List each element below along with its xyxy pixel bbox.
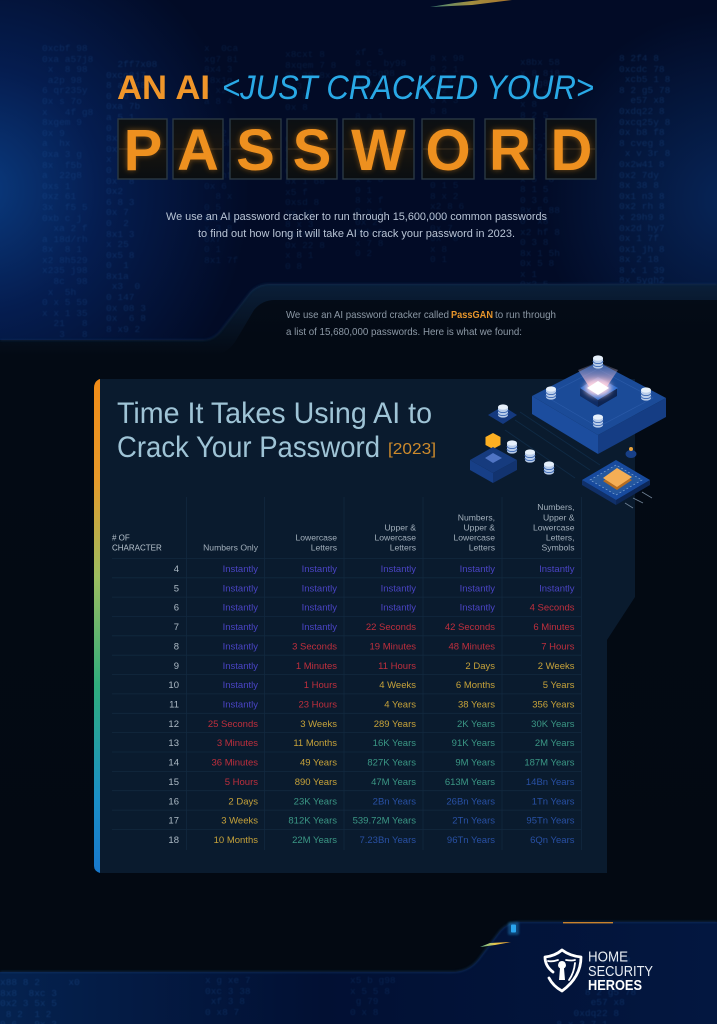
row: 13 characters: 16K Years — [373, 738, 416, 749]
row: 16 characters: 26Bn Years — [446, 796, 495, 807]
column: lowercase letters: Letters — [311, 543, 337, 553]
row: 7 characters: 6 Minutes — [533, 622, 575, 633]
row: 15 characters: 5 Hours — [225, 777, 258, 788]
column: all character types: Symbols — [542, 543, 574, 553]
row: 6 characters: Instantly — [223, 603, 258, 614]
row: 18 characters — [168, 835, 575, 846]
row: 14 characters — [168, 758, 575, 769]
row: 6 characters: Instantly — [381, 603, 416, 614]
row: 9 characters: 2 Weeks — [538, 661, 575, 672]
row: 18 characters: 18 — [168, 835, 179, 846]
tile: W: W — [351, 118, 406, 183]
row: 16 characters: 1Tn Years — [532, 796, 575, 807]
row: 17 characters: 2Tn Years — [452, 816, 495, 827]
column: all character types: Upper & — [543, 513, 575, 523]
row: 4 characters: Instantly — [460, 564, 495, 575]
intro text: to find out how long it will take AI to crack your password in 2023. — [198, 228, 515, 240]
tile: O: O — [425, 118, 471, 183]
row: 4 characters: Instantly — [539, 564, 575, 575]
background pattern: faint hex code columns: 8 x 98 0 2 1 f 8 x 2 0 x 3 8 8 x 1 0 3 xsxfoy 8 8 1 0 0x 3 0 1 5 8 x 2 x2 8 6 0 2 0x 7 0x 8 x 8 0 1 — [430, 53, 476, 265]
row: 10 characters: 1 Hours — [304, 680, 337, 691]
row: 16 characters — [168, 796, 575, 807]
yellow hexagon — [486, 433, 500, 449]
small block — [470, 447, 517, 483]
row: 4 characters: Instantly — [302, 564, 337, 575]
row: 11 characters: 4 Years — [384, 700, 416, 710]
illustration: isometric AI chips — [470, 355, 666, 508]
row: 14 characters: 36 Minutes — [212, 758, 258, 769]
row: 15 characters: 15 — [168, 777, 179, 788]
pin marker — [626, 447, 636, 458]
row: 13 characters: 2M Years — [535, 738, 575, 749]
panel heading: Crack Your Password — [117, 431, 380, 464]
top accent: orange dashes — [430, 0, 512, 7]
background pattern: faint hex code columns: xf 5 8 c by98 x 55g98 0xd 8 8 a 1 x 5 0x 1 8 x 6 x 2 8 0 1 8 x f 0 x 1 0x 2 0xh 8 x 7 8 0 2 — [355, 47, 406, 259]
dark content backdrop with stepped edge — [0, 284, 717, 972]
panel heading: [2023] — [388, 441, 436, 458]
row: 5 characters: 5 — [174, 583, 179, 594]
tile: R: R — [489, 118, 531, 183]
row: 4 characters: Instantly — [223, 564, 258, 575]
row: 11 characters: 38 Years — [458, 700, 495, 710]
title word: PASSWORD flip tiles — [118, 118, 596, 183]
background pattern: faint hex code columns: x g xe 7 0xc 3 38 xf 3 8 0 x8 7 — [205, 975, 251, 1018]
panel heading — [117, 397, 436, 464]
row: 13 characters: 3 Minutes — [217, 738, 258, 749]
column: upper and lowercase: Upper & — [384, 523, 416, 533]
row: 18 characters: 7.23Bn Years — [359, 835, 416, 846]
column: upper and lowercase: Lowercase — [374, 533, 416, 543]
table body — [168, 564, 575, 846]
background pattern: faint hex code columns: x8cxt 8 8xqem 7 8 0x 30 8x g 3 x 8 0x 8 0 7 8x 2a x 2 8hm 0xb j9 8x 1 68 x5 f 0xsd 8 0x 38 8 x 3 0x98j8 0x 22 8 x 8 1 0 8 — [285, 49, 336, 272]
tile: P: P — [124, 118, 162, 183]
large platform — [532, 355, 666, 454]
logo: Home Security Heroes — [545, 950, 653, 994]
panel heading: Time It Takes Using AI to — [117, 397, 432, 430]
row: 12 characters — [168, 719, 575, 730]
column: lowercase letters: Lowercase — [295, 533, 337, 543]
row: 8 characters: 3 Seconds — [292, 641, 337, 652]
column: numbers, upper and lowercase: Upper & — [463, 523, 495, 533]
table: grid lines — [112, 497, 582, 850]
row: 6 characters — [174, 603, 575, 614]
logo: Home Security Heroes: HEROES — [588, 978, 642, 994]
methodology text: PassGAN — [451, 310, 493, 321]
gradient side bar — [94, 379, 100, 873]
row: 12 characters: 25 Seconds — [208, 719, 258, 730]
background pattern: faint hex code columns: 8 2f4 8 0xcdc 78 xcb5 1 8 8 2 g5 78 e57 x8 0xdq22 8 0xcq25y 8 0x b8 f8 8 cveg 8 x v 3r 8 0x2w41 8 0x2 7dy 8x 38 8 0x1 n3 8 0x2 rh 8 x 29h9 8 0x2d hy7 0x 1 7f 0x1 jh 8 8x 2 18 8 x 1 39 8x 5ygh2 9x1 b9y 8x2 5h 8 x 28 8 — [619, 53, 670, 318]
row: 5 characters — [174, 583, 575, 594]
row: 4 characters — [174, 564, 575, 575]
row: 12 characters: 2K Years — [457, 719, 495, 730]
logo: Home Security Heroes: SECURITY — [588, 964, 653, 980]
row: 8 characters: 19 Minutes — [370, 641, 416, 652]
background pattern: faint hex code columns: 2ff7x08 0xcc8j7 8 a0 38x 0 6 0xa 7b a 5 1 0 8 8x2 7 0x 5 5 x 2 a 9 0 1 0x 8 0x2 6 8 3 0x 7 0 2 8x1 3 x 25 0x5 8 0 1 8x1a x3 0 0 147 0x 08 3 0x 6 8 8 x9 2 — [106, 59, 157, 335]
row: 17 characters: 17 — [168, 816, 179, 827]
tile: D: D — [551, 118, 592, 183]
row: 7 characters: Instantly — [223, 622, 258, 633]
row: 14 characters: 49 Years — [300, 758, 337, 769]
row: 10 characters — [168, 680, 575, 691]
row: 7 characters: 7 — [174, 622, 179, 633]
methodology text: to run through — [495, 310, 556, 321]
row: 18 characters: 6Qn Years — [530, 835, 575, 846]
row: 7 characters: 22 Seconds — [366, 622, 416, 633]
row: 18 characters: 10 Months — [214, 835, 258, 846]
table header — [112, 502, 575, 553]
methodology text: a list of 15,680,000 passwords. Here is what we found: — [286, 327, 522, 338]
tile: O: O — [425, 118, 471, 183]
row: 17 characters: 539.72M Years — [353, 816, 416, 827]
row: 10 characters: 6 Months — [456, 680, 495, 691]
row: 9 characters: 1 Minutes — [296, 661, 337, 672]
panel: time to crack table card — [94, 355, 666, 873]
background pattern: faint hex code columns: x5 b g98 x 5 5 8 g 79 0 x 8 — [350, 975, 396, 1018]
row: 13 characters: 11 Months — [293, 738, 337, 749]
column: number of characters — [112, 534, 162, 553]
row: 16 characters: 2 Days — [228, 796, 258, 807]
background pattern: faint hex code columns: x 0ca xg7 8i 8x4 3 8x1g 0 x2 a 8 4 8x 2 2 5h 0x 8c 6 x2 hf 0x 6 8 x 0 5 8x2 4j x 3 8 0x7 0 1 8x1 7f — [204, 43, 238, 266]
row: 12 characters: 3 Weeks — [300, 719, 337, 730]
row: 9 characters: 9 — [174, 661, 179, 672]
row: 12 characters: 30K Years — [531, 719, 575, 730]
row: 4 characters: 4 — [174, 564, 179, 575]
tile: S: S — [293, 118, 331, 183]
title line: An AI just cracked your: AN AI — [117, 69, 210, 107]
row: 7 characters — [174, 622, 575, 633]
intro text — [166, 211, 547, 240]
row: 14 characters: 14 — [168, 758, 179, 769]
column: all character types: Lowercase — [533, 523, 575, 533]
column: all character types — [533, 502, 575, 553]
row: 15 characters: 14Bn Years — [526, 777, 575, 788]
row: 13 characters: 13 — [168, 738, 179, 749]
tile: A: A — [177, 118, 219, 183]
column: numbers, upper and lowercase — [453, 513, 495, 553]
row: 9 characters — [174, 661, 575, 672]
background pattern: faint hex code columns: x8bx 58 x 8 8j8 0 g8 0 x 1 x 8 8 2 5 0 1 8 x 3 0x 2 x 8 3 x 5 8 8 1 5 0 3 6 8x 5 88 0 x8 x2 hf 8 0 3 8 8x 1 5h 0x 5 8 x 1 0x2 5 8 1 9 0 2 68 x 7 f — [520, 57, 560, 322]
row: 4 characters: Instantly — [381, 564, 416, 575]
column: numbers, upper and lowercase: Letters — [469, 543, 495, 553]
row: 10 characters: 4 Weeks — [379, 680, 416, 691]
row: 5 characters: Instantly — [460, 583, 495, 594]
tile: A: A — [177, 118, 219, 183]
row: 5 characters: Instantly — [302, 583, 337, 594]
row: 11 characters — [169, 700, 575, 710]
row: 13 characters: 91K Years — [452, 738, 495, 749]
row: 7 characters: 42 Seconds — [445, 622, 495, 633]
faint circuit traces — [505, 412, 600, 478]
column: numbers only: Numbers Only — [203, 543, 259, 553]
tile: W: W — [351, 118, 406, 183]
row: 8 characters: 8 — [174, 641, 179, 652]
tile: P: P — [123, 118, 162, 183]
logo: Home Security Heroes: HOME — [588, 950, 628, 966]
methodology text — [286, 310, 556, 338]
column: lowercase letters — [295, 533, 337, 553]
row: 17 characters: 95Tn Years — [526, 816, 575, 827]
row: 17 characters: 3 Weeks — [221, 816, 258, 827]
row: 16 characters: 23K Years — [294, 796, 337, 807]
column: all character types: Letters, — [546, 533, 574, 543]
row: 6 characters: 4 Seconds — [530, 603, 575, 614]
row: 17 characters — [168, 816, 575, 827]
row: 14 characters: 9M Years — [455, 758, 495, 769]
row: 14 characters: 187M Years — [524, 758, 575, 769]
row: 15 characters: 613M Years — [445, 777, 495, 788]
column: all character types: Numbers, — [537, 502, 574, 512]
row: 6 characters: Instantly — [460, 603, 495, 614]
row: 8 characters: 48 Minutes — [449, 641, 495, 652]
bottom accents: orange dashes and blue light — [480, 922, 613, 947]
row: 6 characters: Instantly — [302, 603, 337, 614]
column: numbers, upper and lowercase: Numbers, — [458, 513, 495, 523]
row: 11 characters: Instantly — [223, 700, 258, 710]
column: numbers, upper and lowercase: Lowercase — [453, 533, 495, 543]
row: 8 characters — [174, 641, 575, 652]
row: 12 characters: 289 Years — [374, 719, 416, 730]
column: upper and lowercase — [374, 523, 416, 553]
small plate — [488, 404, 517, 424]
row: 9 characters: 11 Hours — [378, 661, 416, 672]
row: 18 characters: 22M Years — [292, 835, 337, 846]
row: 6 characters: 6 — [174, 603, 179, 614]
row: 13 characters — [168, 738, 575, 749]
circuit board chip — [582, 460, 652, 508]
row: 16 characters: 16 — [168, 796, 179, 807]
row: 5 characters: Instantly — [539, 583, 575, 594]
background pattern: faint hex code columns: 0xcbf 98 0xa a57j8 x 8 98 a2p 98 6 qr235y 0x s 7o x 4f g8 8xgem 9 0x 9 a hx 0xa 3 g 8x f5b a 22g8 0xs 1 0xz 61 3x f5 5 0xb c j xa 2 f a 18d/rh 8x 8 1 x2 8h529 x235 j98 8c 98 x 5h 0 x 5 59 x x 1 35 21 8 3 8 — [42, 43, 93, 340]
tile: S: S — [293, 118, 331, 183]
row: 17 characters: 812K Years — [288, 816, 337, 827]
row: 14 characters: 827K Years — [367, 758, 416, 769]
tile: D: D — [551, 118, 592, 183]
column: number of characters: CHARACTER — [112, 544, 162, 553]
row: 5 characters: Instantly — [223, 583, 258, 594]
row: 11 characters: 11 — [169, 700, 179, 710]
tile: S: S — [236, 118, 275, 183]
title line: An AI just cracked your: <JUST CRACKED YOUR> — [222, 69, 594, 107]
row: 9 characters: Instantly — [223, 661, 258, 672]
row: 11 characters: 356 Years — [532, 700, 575, 710]
row: 10 characters: Instantly — [223, 680, 258, 691]
row: 10 characters: 5 Years — [543, 680, 575, 691]
row: 9 characters: 2 Days — [465, 661, 495, 672]
row: 5 characters: Instantly — [381, 583, 416, 594]
row: 18 characters: 96Tn Years — [447, 835, 495, 846]
row: 12 characters: 12 — [168, 719, 179, 730]
row: 16 characters: 2Bn Years — [373, 796, 416, 807]
icon: shield with keyhole — [545, 950, 581, 991]
row: 7 characters: Instantly — [302, 622, 337, 633]
row: 15 characters: 890 Years — [295, 777, 337, 788]
intro text: We use an AI password cracker to run through 15,600,000 common passwords — [166, 211, 547, 223]
row: 11 characters: 23 Hours — [298, 700, 337, 710]
row: 8 characters: 7 Hours — [541, 641, 575, 652]
tile: R: R — [489, 118, 531, 183]
column: upper and lowercase: Letters — [390, 543, 416, 553]
row: 10 characters: 10 — [168, 680, 179, 691]
row: 15 characters: 47M Years — [371, 777, 416, 788]
column: number of characters: # OF — [112, 534, 130, 542]
row: 8 characters: Instantly — [223, 641, 258, 652]
methodology text: We use an AI password cracker called — [286, 310, 449, 321]
tile: S: S — [236, 118, 275, 183]
row: 15 characters — [168, 777, 575, 788]
